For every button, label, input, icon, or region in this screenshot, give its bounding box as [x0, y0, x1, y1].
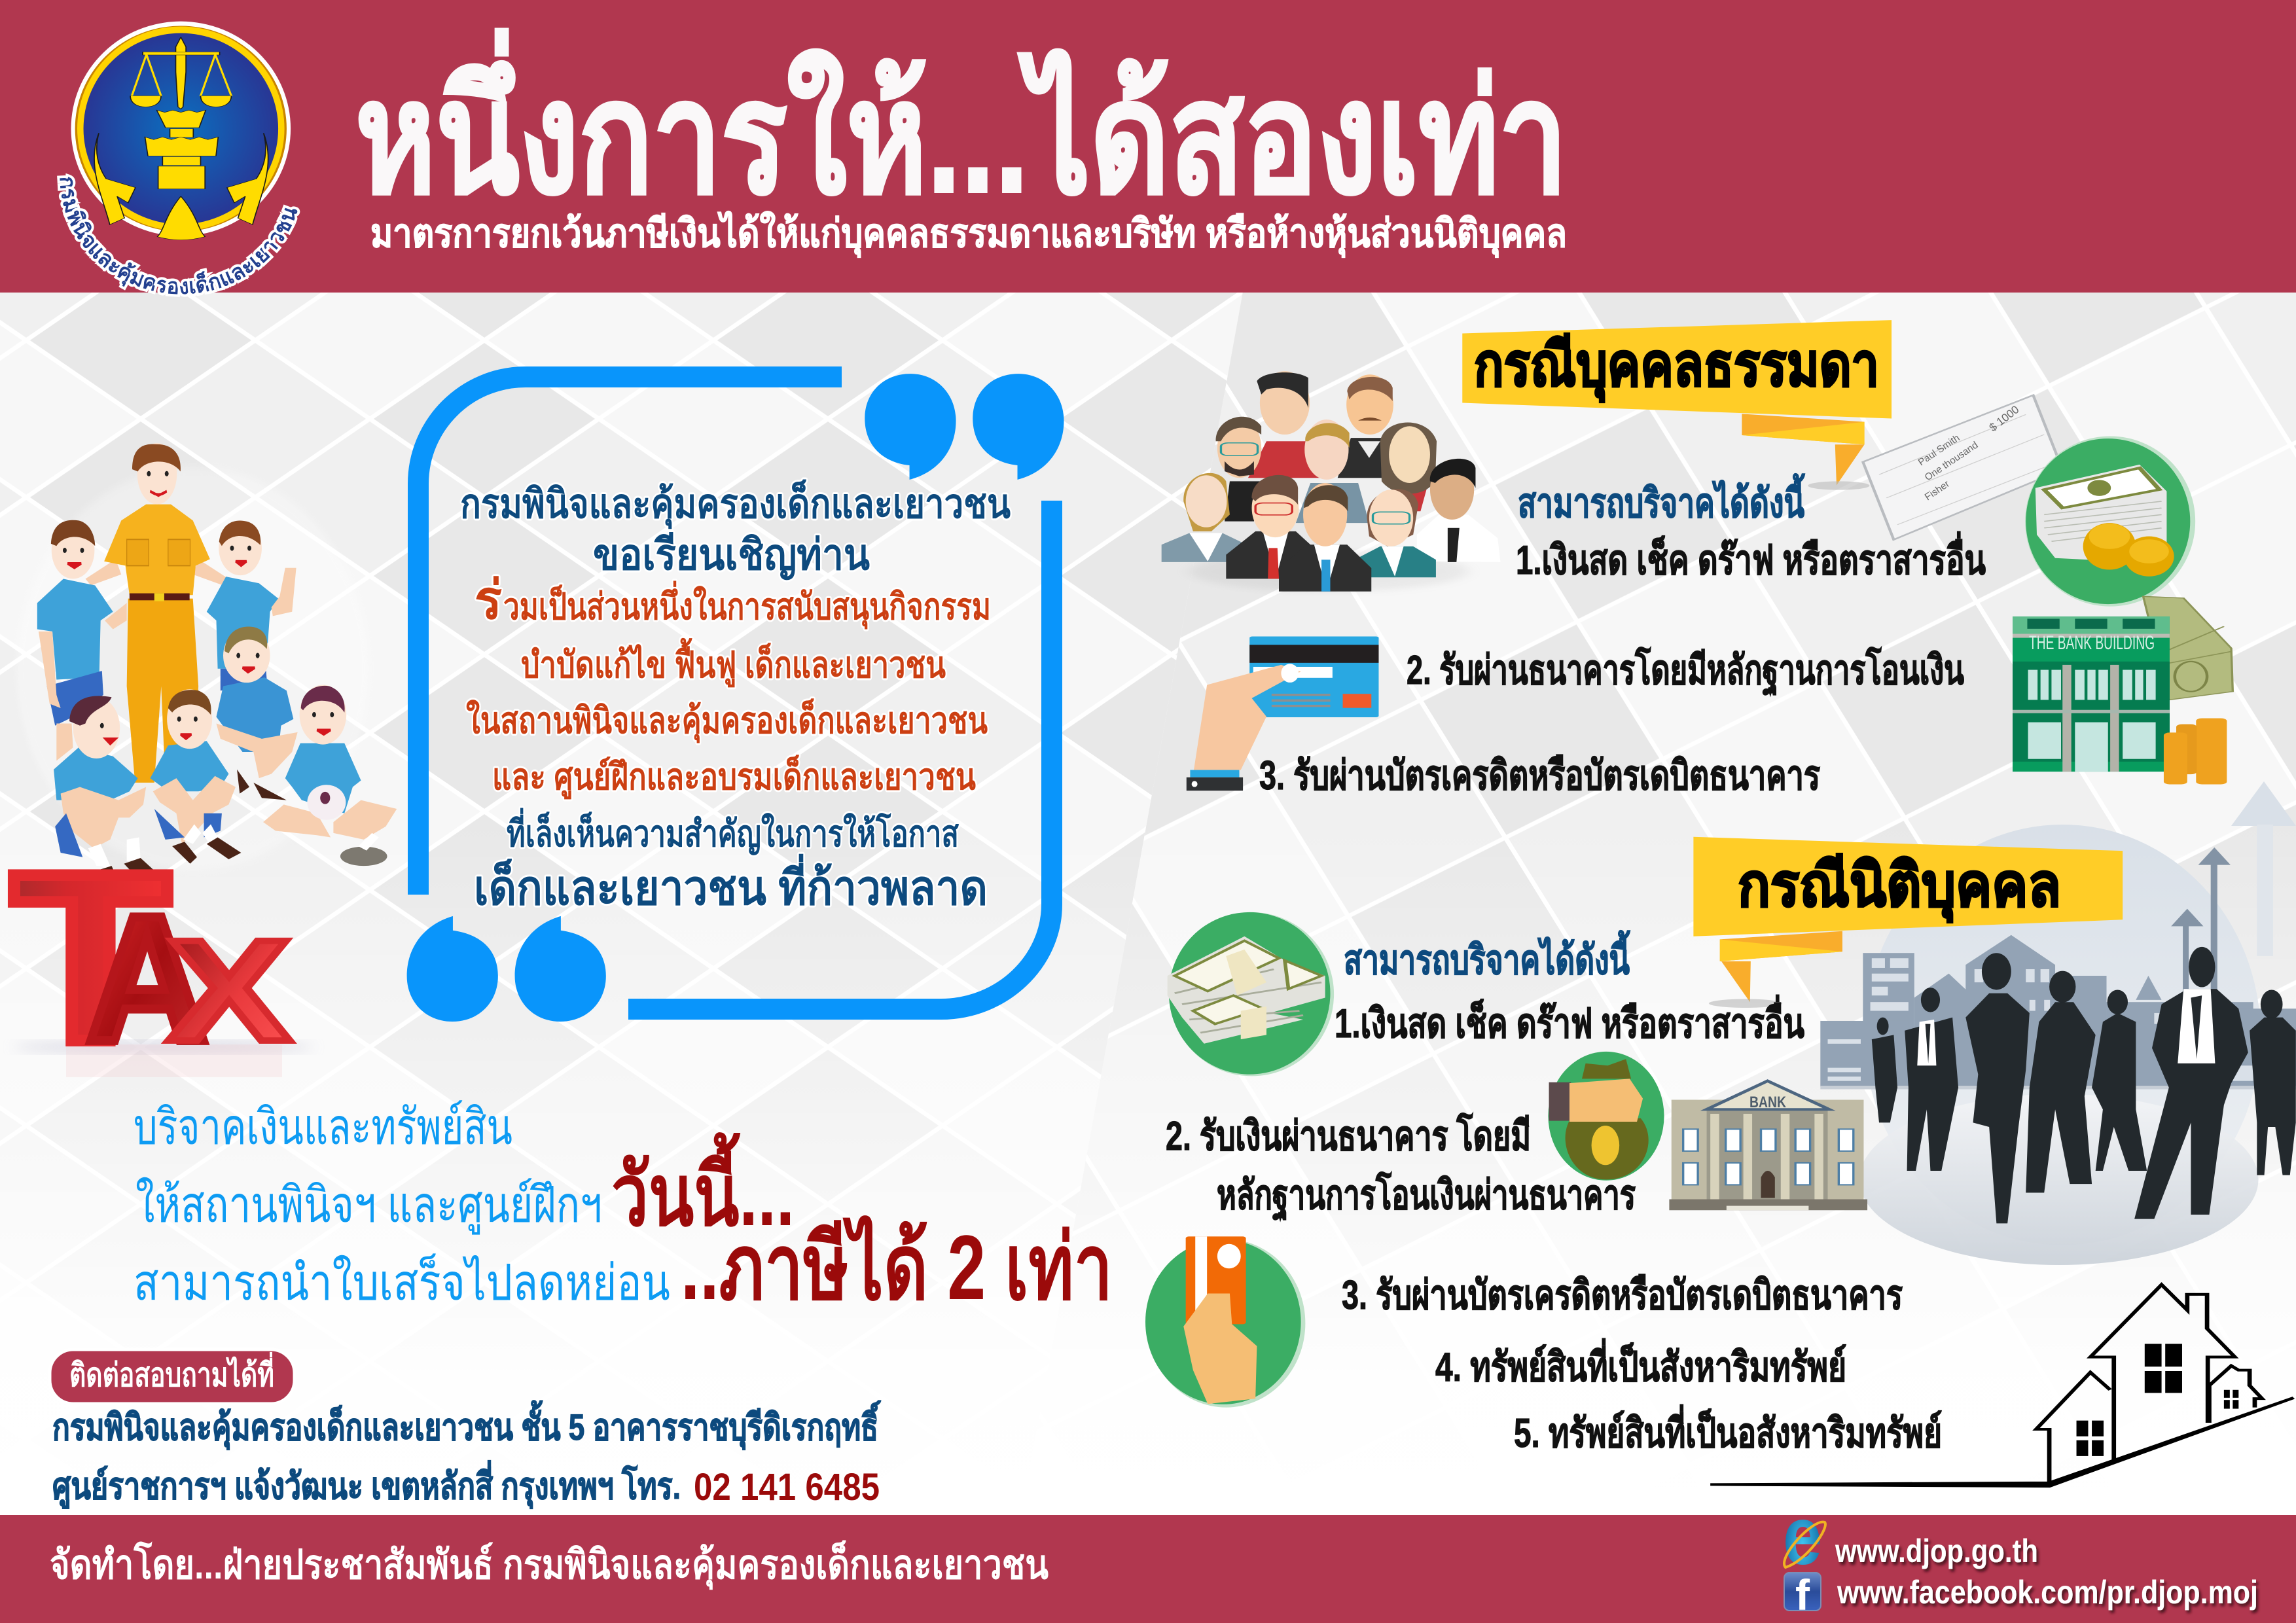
icon: web browser: e: [1783, 1489, 1822, 1582]
banner: juristic persons: [1693, 837, 2123, 1008]
invitation text block: ในสถานพินิจและคุ้มครองเด็กและเยาวชน: [466, 698, 988, 743]
text: item 3 persons: 3. รับผ่านบัตรเครดิตหรือบัตรเดบิตธนาคาร: [1259, 753, 1820, 798]
invitation text block: กรมพินิจและคุ้มครองเด็กและเยาวชน: [460, 479, 1011, 529]
invitation text block: ร่: [475, 571, 502, 630]
icon: facebook: [1784, 1571, 1821, 1619]
handwritten message: donate money: วันนี้...: [611, 1132, 795, 1243]
handwritten message: donate money: ..ภาษีได้ 2 เท่า: [681, 1215, 1113, 1319]
growth arrows: [2171, 847, 2231, 1005]
illustration: green bank with money and coins: [2013, 596, 2233, 784]
icon: hand holding card: [1187, 637, 1378, 791]
contact address: [52, 1400, 881, 1509]
boy middle right: [216, 627, 298, 800]
silhouettes: [1872, 947, 2296, 1223]
bank sign: THE BANK BUILDING: [2029, 632, 2155, 654]
person: [1296, 419, 1369, 523]
text: item 2 juristic line 2: หลักฐานการโอนเงินผ่านธนาคาร: [1217, 1171, 1636, 1221]
contact address: กรมพินิจและคุ้มครองเด็กและเยาวชน ชั้น 5 อาคารราชบุรีดิเรกฤทธิ์: [52, 1400, 881, 1450]
cheque writing: One thousand: [1923, 440, 1980, 483]
person: [1354, 489, 1436, 577]
banner: juristic persons: กรณีนิติบุคคล: [1738, 852, 2061, 923]
quote frame: [418, 377, 1052, 1009]
handwritten message: donate money: สามารถนำใบเสร็จไปลดหย่อน: [134, 1253, 670, 1311]
person: [1338, 374, 1393, 478]
invitation text block: ขอเรียนเชิญท่าน: [593, 530, 870, 580]
subtitle: มาตรการยกเว้นภาษีเงินได้ให้แก่บุคคลธรรมดาและบริษัท หรือห้างหุ้นส่วนนิติบุคคล: [370, 210, 1567, 258]
bank label: BANK: [1749, 1094, 1787, 1111]
boy sitting right with ball: [263, 685, 397, 866]
illustration: city skyline and business silhouettes: [1820, 825, 2296, 1265]
person: [1248, 371, 1321, 478]
banner: natural persons: [1462, 320, 1892, 490]
person: [1279, 483, 1371, 592]
pale growth arrow top right: [2231, 781, 2296, 826]
text: can donate (juristic): สามารถบริจาคได้ดังนี้: [1344, 930, 1630, 983]
text: item 1 persons: 1.เงินสด เช็ค ดร๊าฟ หรือตราสารอื่น: [1516, 531, 1986, 583]
text: item 1 juristic: 1.เงินสด เช็ค ดร๊าฟ หรือตราสารอื่น: [1335, 995, 1804, 1046]
icon: hand holding money bag: [1548, 1052, 1664, 1181]
illustration: group of people: [1162, 371, 1501, 592]
person: [1162, 473, 1247, 562]
person: [1380, 422, 1437, 511]
contact pill: ติดต่อสอบถามได้ที่: [69, 1352, 274, 1393]
handwritten message: donate money: [134, 1099, 1113, 1319]
boy sitting left: [54, 696, 161, 892]
logo: department emblem: [57, 21, 300, 297]
icon: houses on slope: [1710, 1285, 2293, 1486]
illustration: children with officer: [16, 443, 397, 892]
contact address: ศูนย์ราชการฯ แจ้งวัฒนะ เขตหลักสี่ กรุงเทพฯ โทร.: [52, 1460, 681, 1509]
boy back left: [37, 520, 127, 760]
illustration: classical bank: [1669, 1081, 1867, 1210]
text: item 4 juristic: 4. ทรัพย์สินที่เป็นสังหาริมทรัพย์: [1435, 1338, 1846, 1390]
person: [1226, 475, 1321, 579]
boy back right: [207, 521, 296, 669]
text: item 5 juristic: 5. ทรัพย์สินที่เป็นอสังหาริมทรัพย์: [1514, 1404, 1942, 1456]
title: หนึ่งการให้...ได้สองเท่า: [355, 29, 1568, 225]
cheque writing: Fisher: [1923, 478, 1952, 503]
person: [1216, 417, 1263, 522]
text: item 2 persons: 2. รับผ่านธนาคารโดยมีหลักฐานการโอนเงิน: [1407, 646, 1964, 696]
person: [1417, 459, 1501, 562]
cheque writing: [1916, 403, 2021, 503]
letter X: X: [167, 910, 291, 1072]
quote marks: [407, 374, 1064, 1022]
buildings: [1820, 935, 2296, 1086]
illustration: 3D TAX letters: [11, 823, 314, 1092]
website url: www.djop.go.th: [1835, 1533, 2038, 1569]
cheque writing: $ 1000: [1987, 403, 2021, 434]
text: item 2 juristic line 1: 2. รับเงินผ่านธนาคาร โดยมี: [1166, 1112, 1531, 1159]
handwritten message: donate money: บริจาคเงินและทรัพย์สิน: [134, 1099, 512, 1155]
illustration: cheque: [1863, 395, 2062, 540]
officer: [86, 443, 228, 783]
icon: cash and coins: [2025, 437, 2195, 607]
page background with tiled pattern: [0, 293, 2296, 1202]
header band: [0, 0, 2296, 293]
cheque writing: Paul Smith: [1916, 433, 1962, 468]
icon: hand holding orange card: [1145, 1236, 1305, 1408]
invitation text block: บำบัดแก้ไข ฟื้นฟู เด็กและเยาวชน: [521, 638, 946, 688]
letter T: T: [11, 823, 170, 1092]
icon: stacks of cash: [1168, 912, 1334, 1076]
invitation text block: เด็กและเยาวชน ที่ก้าวพลาด: [474, 853, 988, 915]
footer credit: จัดทำโดย...ฝ่ายประชาสัมพันธ์ กรมพินิจและคุ้มครองเด็กและเยาวชน: [50, 1540, 1049, 1590]
text: item 3 juristic: 3. รับผ่านบัตรเครดิตหรือบัตรเดบิตธนาคาร: [1342, 1273, 1903, 1318]
icon: facebook: f: [1795, 1571, 1810, 1619]
invitation text block: ที่เล็งเห็นความสำคัญในการให้โอกาส: [507, 808, 960, 855]
banner: natural persons: กรณีบุคคลธรรมดา: [1474, 332, 1879, 402]
footer band: [0, 1515, 2296, 1623]
invitation text block: และ ศูนย์ฝึกและอบรมเด็กและเยาวชน: [492, 754, 976, 800]
text: can donate (persons): สามารถบริจาคได้ดังนี้: [1518, 473, 1805, 526]
letter A: A: [86, 879, 208, 1079]
handwritten message: donate money: ให้สถานพินิจฯ และศูนย์ฝึกฯ: [135, 1177, 602, 1235]
invitation text block: วมเป็นส่วนหนึ่งในการสนับสนุนกิจกรรม: [503, 580, 991, 630]
logo ring text: กรมพินิจและคุ้มครองเด็กและเยาวชน: [57, 173, 300, 297]
invitation text block: [460, 479, 1011, 915]
contact address: 02 141 6485: [694, 1466, 880, 1508]
contact pill: [50, 1349, 295, 1404]
boy sitting centre: [150, 689, 241, 864]
